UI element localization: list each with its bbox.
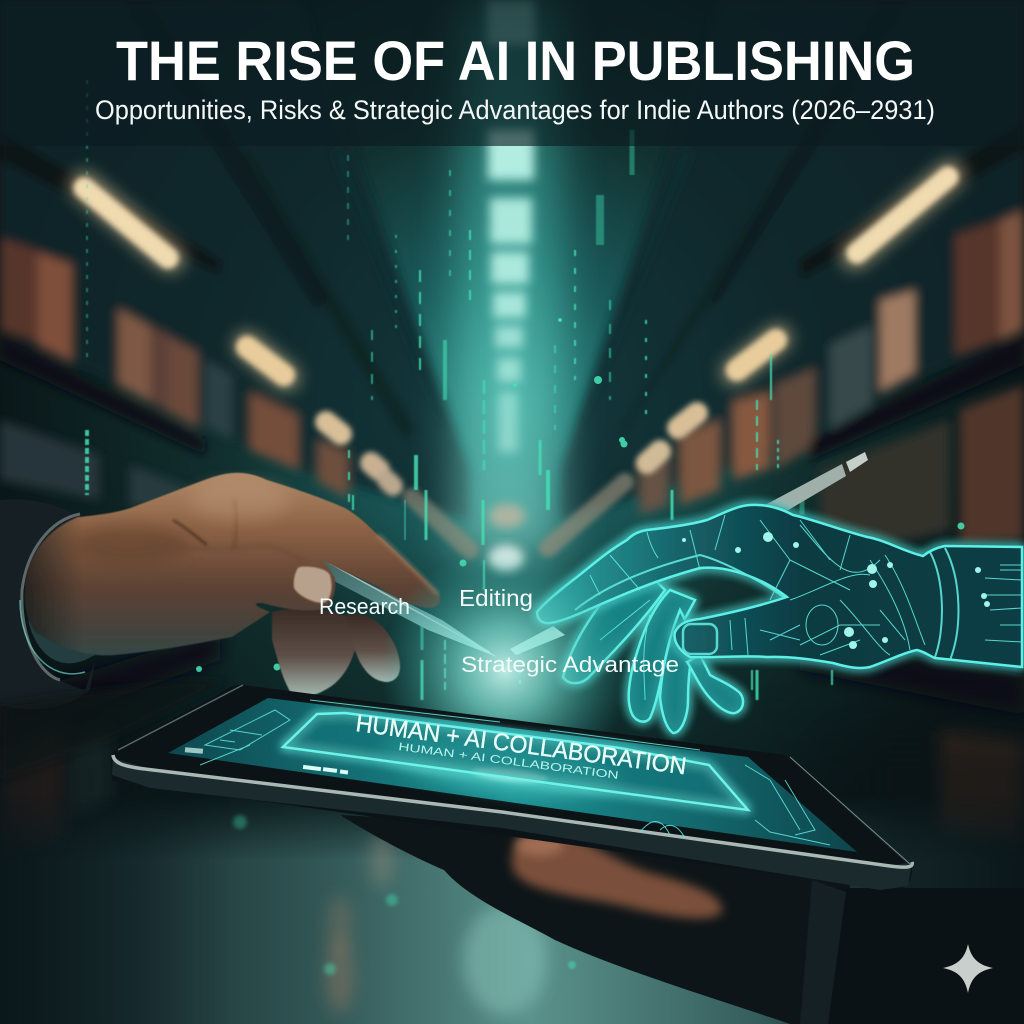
subtitle: Opportunities, Risks & Strategic Advantages for Indie Authors (2026–2931)	[95, 95, 935, 125]
callout labels	[319, 585, 679, 677]
central light beam	[455, 0, 560, 571]
title: THE RISE OF AI IN PUBLISHING	[116, 29, 915, 92]
right bookshelves	[560, 0, 1024, 560]
title banner	[0, 0, 1024, 146]
label: Research: Research	[319, 594, 410, 619]
centre glow burst	[380, 545, 630, 795]
holographic frame on tablet	[283, 713, 748, 810]
left bookshelves	[0, 0, 470, 520]
circuit traces on AI hand	[575, 515, 1022, 700]
AI palm, index finger and thumb	[537, 505, 1022, 668]
lower fingers of human hand	[272, 608, 400, 696]
label: Editing: Editing	[459, 585, 533, 611]
tablet	[111, 685, 912, 890]
AI hand pen	[510, 452, 868, 655]
holding hand beneath tablet	[340, 815, 1024, 1024]
ceiling lamps	[84, 175, 950, 550]
digital rain	[87, 80, 832, 700]
lower shelves in shadow	[0, 630, 1024, 865]
floating particles	[196, 318, 964, 975]
icon: sparkle	[943, 944, 993, 993]
label: Strategic Advantage: Strategic Advantage	[461, 652, 679, 677]
tablet UI details	[200, 700, 830, 845]
tablet sub-heading: HUMAN + AI COLLABORATION	[398, 741, 619, 782]
floor	[6, 806, 1020, 1024]
AI fingers	[563, 565, 743, 733]
tablet heading: HUMAN + AI COLLABORATION	[354, 710, 688, 780]
human hand	[25, 473, 440, 655]
human pen	[286, 546, 497, 657]
human arm and suit sleeve	[0, 499, 230, 780]
AI holographic hand	[537, 505, 1022, 733]
